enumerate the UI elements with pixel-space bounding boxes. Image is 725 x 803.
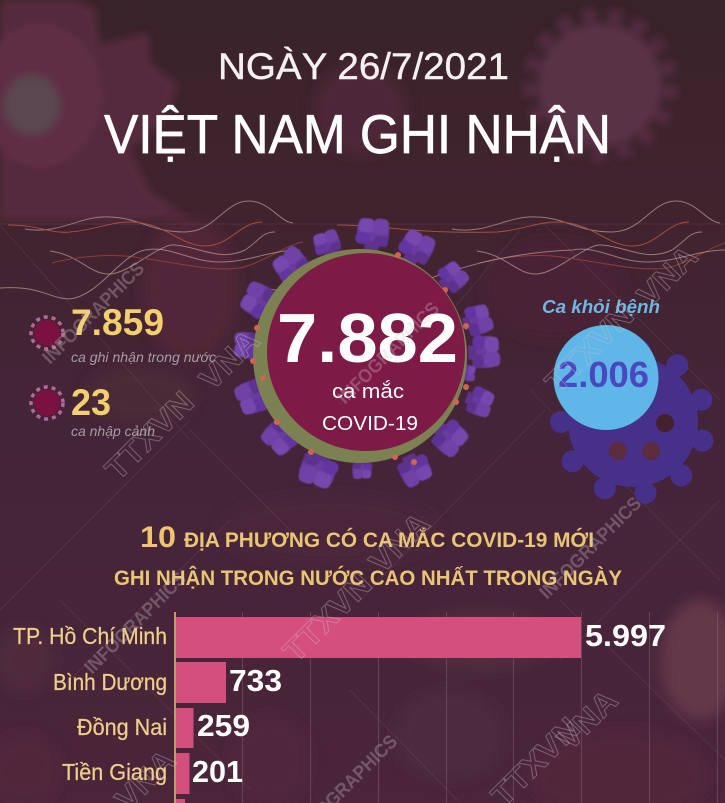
diagonal watermark lines [0, 224, 725, 803]
row: Tiền Giang [62, 754, 243, 789]
domestic cases number: 7.859 [71, 302, 164, 343]
wavy lines left [0, 201, 303, 299]
recovered circle [554, 325, 658, 430]
row: Đồng Nai: 259 [197, 708, 250, 743]
row: Đồng Nai: Đồng Nai [77, 714, 167, 740]
virus membrane [253, 249, 467, 463]
watermarks: INFOGRAPHICS [39, 258, 149, 369]
big number circle [267, 253, 465, 451]
icon: imported virus [31, 387, 63, 419]
chart heading: ĐỊA PHƯƠNG CÓ CA MẮC COVID-19 MỚI [184, 528, 594, 552]
watermarks [39, 239, 704, 803]
watermarks: VNA [362, 506, 436, 580]
watermarks: INFOGRAPHICS [81, 568, 191, 679]
watermarks: VNA [192, 323, 266, 397]
domestic cases label: ca ghi nhận trong nước [71, 349, 216, 365]
total cases label line 1: ca mắc [332, 380, 404, 403]
total cases label line 2: COVID-19 [322, 413, 418, 435]
row: Bình Dương [53, 663, 282, 698]
wavy lines right [257, 201, 725, 299]
imported cases label: ca nhập cảnh [71, 423, 155, 439]
row: Tiền Giang: Tiền Giang [62, 759, 167, 785]
watermarks: VNA [630, 239, 704, 313]
chart heading: 10 [140, 521, 176, 554]
row: Tiền Giang: 201 [192, 754, 243, 789]
title: date: NGÀY 26/7/2021 [218, 46, 509, 87]
row: Bình Dương: 733 [229, 663, 282, 698]
imported cases number: 23 [71, 382, 111, 423]
icon: recovered virus [550, 338, 716, 506]
chart heading [114, 521, 622, 590]
title: main: VIỆT NAM GHI NHẬN [104, 103, 611, 165]
icon: domestic virus [31, 317, 63, 349]
row: Bình Dương: Bình Dương [53, 669, 167, 695]
watermarks: TTXVN [276, 566, 379, 669]
row: Đồng Nai [77, 708, 250, 743]
row: TP. Hồ Chí Minh [13, 618, 666, 653]
row: TP. Hồ Chí Minh: TP. Hồ Chí Minh [13, 623, 167, 649]
total cases number: 7.882 [277, 299, 458, 377]
watermarks: INFOGRAPHICS [334, 298, 444, 409]
watermarks: VNA [550, 683, 624, 757]
bar chart [13, 612, 718, 803]
watermarks: TTXVN [538, 297, 641, 400]
recovered label: Ca khỏi bệnh [542, 297, 660, 317]
watermarks: INFOGRAPHICS [536, 493, 646, 604]
background viruses [0, 0, 670, 220]
main virus illustration [232, 216, 501, 492]
chart heading: GHI NHẬN TRONG NƯỚC CAO NHẤT TRONG NGÀY [114, 566, 622, 590]
recovered number: 2.006 [558, 354, 649, 395]
bars [176, 617, 581, 803]
watermarks: TTXVN [98, 384, 201, 487]
row: TP. Hồ Chí Minh: 5.997 [585, 618, 666, 653]
virus spikes [232, 216, 501, 492]
